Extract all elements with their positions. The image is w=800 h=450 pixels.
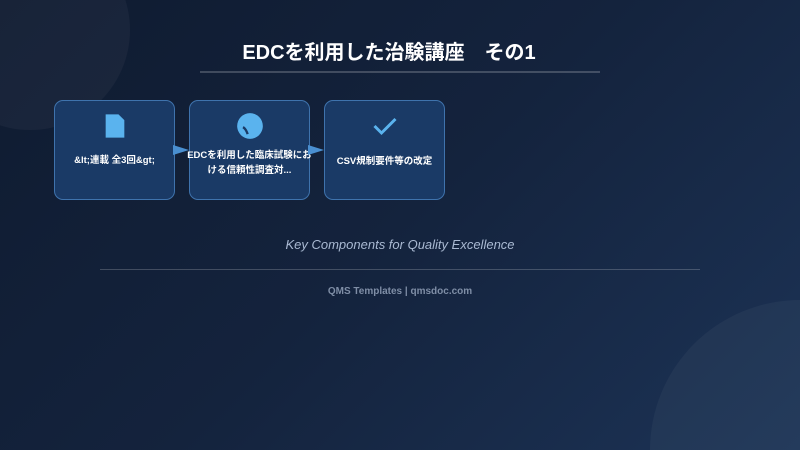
card: reliability [189, 100, 310, 200]
subtitle: Key Components for Quality Excellence [285, 237, 515, 252]
icon: globe [237, 113, 263, 139]
footer: QMS Templates | qmsdoc.com [328, 286, 472, 297]
card: series [54, 100, 175, 200]
arrow 2 [308, 145, 324, 155]
title: EDCを利用した治験講座 その1 [242, 42, 536, 64]
text: CSV規制要件等の改定 [337, 156, 432, 167]
text: &lt;連載 全3回&gt; [74, 155, 155, 166]
text: ける信頼性調査対... [208, 165, 291, 176]
text: EDCを利用した臨床試験にお [187, 150, 312, 161]
icon: check [374, 118, 396, 135]
text [187, 150, 312, 176]
card: CSV [324, 100, 445, 200]
icon: document [106, 114, 124, 138]
arrow 1 [173, 145, 189, 155]
